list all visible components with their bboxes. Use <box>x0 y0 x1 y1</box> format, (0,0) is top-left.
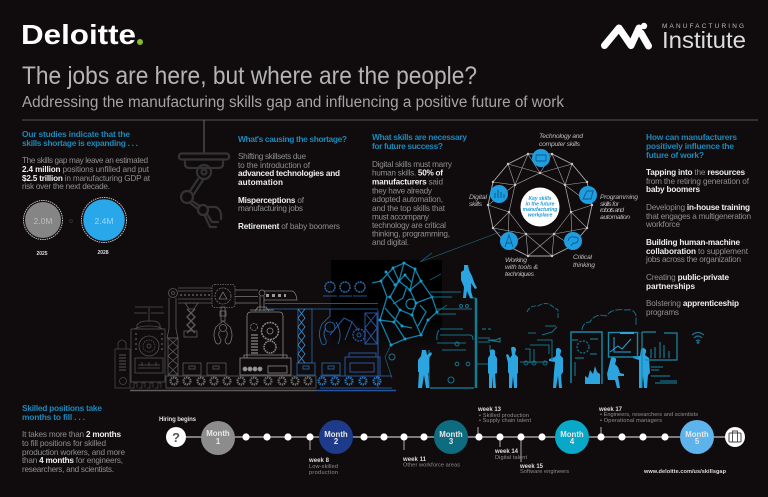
icon: critical thinking <box>564 232 582 250</box>
machine: left cabinet <box>115 340 161 388</box>
heading: influence <box>646 132 737 160</box>
text: human-machine: jobs across the organization <box>645 255 741 264</box>
text: human-machine: collaboration to supplement <box>646 247 749 256</box>
hub: key skills <box>520 188 560 226</box>
text: misperceptions: Misperceptions of <box>238 196 305 205</box>
text: partnerships: partnerships <box>646 282 695 291</box>
text: in-house: that engages a multigeneration <box>646 212 751 221</box>
text: skilled positions paragraph: researchers, and scientists. <box>22 465 114 474</box>
text: apprenticeship: programs <box>646 308 679 317</box>
icon: briefcase <box>725 427 745 447</box>
machine: control cabinet <box>240 307 291 375</box>
icon: question mark <box>166 427 186 447</box>
label: week 11 <box>402 457 460 468</box>
text: skills gap line 4: risk over the next decade. <box>22 182 110 191</box>
heading: skills: What skills are necessary <box>372 132 467 142</box>
person: sitting <box>607 357 624 388</box>
label: week 17: • Operational managers <box>600 418 662 424</box>
node: month 3: Month <box>439 430 463 439</box>
text: tapping: baby boomers <box>646 185 700 194</box>
hub: key skills: Key skills <box>528 196 552 202</box>
heading: influence: future of work? <box>646 150 704 160</box>
label: hiring begins: Hiring begins <box>159 417 197 423</box>
label: programming: Programming <box>600 194 638 201</box>
chart: 2025 circle <box>24 200 62 257</box>
text: in-house <box>645 203 751 229</box>
text: skills paragraph: Digital skills must marry <box>372 160 453 169</box>
text: in-house: Developing in-house training <box>646 203 750 212</box>
screen: gear dashboard <box>571 332 602 384</box>
label: tools: techniques <box>505 271 535 278</box>
heading: studies: Our studies indicate that the <box>22 129 130 139</box>
person: looking up <box>418 350 432 388</box>
label: programming <box>600 194 638 221</box>
text: skills paragraph: manufacturers said <box>372 178 443 186</box>
conveyor belt gray <box>130 376 316 390</box>
node: month 2: Month <box>324 430 348 439</box>
node: month 1: Month <box>206 429 230 438</box>
label: critical thinking: Critical <box>573 254 592 261</box>
cloud: right <box>582 310 636 330</box>
label: week 11: Other workforce areas <box>403 462 460 468</box>
black backdrop behind network burst <box>331 260 442 350</box>
hub: key skills: manufacturing <box>523 207 557 213</box>
panel: skills necessary <box>372 132 467 247</box>
text: skills paragraph: adopted automation, <box>372 195 443 204</box>
machine: gear and claw <box>212 284 235 344</box>
text: partnerships <box>646 273 729 291</box>
label: week 13 <box>477 407 531 424</box>
text: skills paragraph: technology are critical <box>372 221 446 230</box>
text: skilled positions paragraph <box>22 430 125 474</box>
text: tapping: from the retiring generation of <box>646 177 750 186</box>
text: apprenticeship <box>646 299 739 317</box>
text: skills paragraph: and the top skills that <box>372 204 446 213</box>
node: month 3: 3 <box>449 437 454 446</box>
person: standing <box>488 349 497 388</box>
label: tools: Working <box>505 257 527 264</box>
label: critical thinking: thinking <box>573 262 595 269</box>
heading: skills line 2: for future success? <box>372 141 443 151</box>
text: skills gap line 3: $2.5 trillion in manufacturing GDP at <box>22 174 151 183</box>
robot heads row <box>323 282 367 296</box>
icon: digital <box>490 185 508 203</box>
label: week 15 <box>519 464 569 475</box>
heading: skilled positions: Skilled positions take <box>22 403 102 413</box>
title: The jobs are here, but where are the people? <box>22 62 477 90</box>
node: month 5 <box>680 420 714 454</box>
text: skills paragraph: thinking, programming, <box>372 230 450 238</box>
chart: 2028 circle: 2.4M <box>95 216 113 226</box>
icon: question mark: ? <box>172 430 180 445</box>
heading: influence: positively influence the <box>646 141 734 151</box>
icon: wifi <box>692 332 704 343</box>
heading: skilled positions: months to fill . . . <box>22 412 85 422</box>
label: week 8: Low-skilled <box>309 464 338 470</box>
text: automation: automation <box>238 178 283 187</box>
label: week 14 <box>494 449 527 461</box>
machine: blue rail and lattice <box>265 304 378 375</box>
node: month 2 <box>319 420 353 454</box>
text: skilled positions paragraph: than 4 months for engineers, <box>22 456 123 465</box>
text: skills paragraph: they have already <box>372 186 433 196</box>
person: with chart <box>549 348 563 388</box>
label: digital <box>469 194 487 208</box>
chart: 2025 circle: 2.0M <box>34 216 52 226</box>
label: programming: skills for <box>600 201 620 208</box>
text: advanced technologies: advanced technologies and <box>238 169 340 178</box>
text: retirement: Retirement of baby boomers <box>238 222 340 231</box>
text: partnerships: Creating public-private <box>646 273 729 282</box>
machine: rail <box>235 290 297 311</box>
label: week 13: week 13 <box>477 407 502 413</box>
text: tapping <box>646 168 750 194</box>
text: introduction: to the introduction of <box>238 161 311 170</box>
text: shifting skillsets: Shifting skillsets due <box>238 152 306 161</box>
node: month 3 <box>434 420 468 454</box>
ticks <box>310 427 601 462</box>
machine: pillar with arm <box>167 288 212 375</box>
heading: skilled positions <box>22 403 102 422</box>
illustration: people <box>418 265 650 388</box>
label: digital: skills <box>469 201 483 208</box>
icon: robot arm <box>179 154 229 227</box>
label: week 17 <box>598 407 698 424</box>
text: skills gap line 1: The skills gap may leave an estimated <box>22 156 148 165</box>
screen: line chart <box>608 332 638 357</box>
label: week 8: production <box>309 470 338 476</box>
heading: causing: What's causing the shortage? <box>238 134 347 144</box>
heading: influence: How can manufacturers <box>646 132 737 142</box>
person: on tower <box>461 265 477 298</box>
illustration: factory production line <box>115 282 396 390</box>
illustration: dashboards and clouds <box>482 304 677 388</box>
logo: Deloitte: Deloitte <box>21 19 136 50</box>
node: month 4 <box>555 420 589 454</box>
panel: skilled positions text <box>22 403 125 474</box>
text: human-machine: Building human-machine <box>646 238 740 247</box>
text: in-house: workforce <box>645 220 680 229</box>
label: week 15: Software engineers <box>520 469 569 475</box>
subtitle: Addressing the manufacturing skills gap and influencing a positive future of work <box>22 94 564 111</box>
screen: bar chart <box>642 332 677 388</box>
illustration: digital network burst <box>372 232 500 378</box>
label: tools <box>505 257 538 278</box>
text: skilled positions paragraph: It takes more than 2 months <box>22 430 121 439</box>
text: skills paragraph: human skills. 50% of <box>372 168 443 178</box>
person: holding tablet <box>506 347 518 388</box>
label: programming: robots and <box>600 207 624 214</box>
boxes on belt <box>183 363 226 375</box>
text: human-machine <box>645 238 749 264</box>
text: apprenticeship: Bolstering apprenticeship <box>646 299 739 308</box>
label: week 14: week 14 <box>494 449 519 455</box>
node: month 1 <box>201 421 235 455</box>
label: week 15: week 15 <box>519 464 544 470</box>
text: skills paragraph: must accompany <box>372 212 430 222</box>
text: tapping: Tapping into the resources <box>646 168 745 177</box>
icon: flow elements <box>520 326 557 365</box>
icon: programming <box>579 186 597 204</box>
logo: Manufacturing Institute: MANUFACTURING <box>662 23 744 30</box>
label: week 13: • Supply chain talent <box>479 418 531 424</box>
chart: 2028 circle <box>82 198 126 256</box>
logo: Manufacturing Institute: Institute <box>662 27 746 53</box>
label: week 17: week 17 <box>598 407 623 413</box>
label: week 11: week 11 <box>402 457 427 463</box>
panel: how can manufacturers influence <box>645 132 751 317</box>
person: presenting <box>633 348 650 388</box>
label: critical thinking <box>573 254 595 269</box>
chart: 2028 circle: 2028 <box>97 250 109 256</box>
icon: technology <box>532 149 550 167</box>
node: month 4: 4 <box>570 437 575 446</box>
url: www.deloitte.com/us/skillsgap <box>643 469 727 475</box>
panel: skills shortage expanding <box>22 129 151 257</box>
label: technology: Technology and <box>539 133 583 140</box>
node: month 5: Month <box>685 430 709 439</box>
node: month 4: Month <box>560 430 584 439</box>
label: week 17: • Engineers, researchers and scientists <box>600 412 698 418</box>
panel: what's causing the shortage <box>238 134 347 231</box>
illustration: tower <box>429 292 490 388</box>
node: month 2: 2 <box>334 437 339 446</box>
timeline dots <box>242 433 669 441</box>
text: skilled positions paragraph: production workers, and more <box>22 448 125 457</box>
text: skilled positions paragraph: to fill positions for skilled <box>22 439 106 448</box>
text: skills gap line 2: 2.4 million positions unfilled and put <box>22 165 150 174</box>
label: week 14: Digital talent <box>495 455 527 461</box>
robot arm and gear blue <box>316 310 396 390</box>
text: skills paragraph: and digital. <box>372 238 409 247</box>
hub: key skills: workplace <box>528 212 552 218</box>
chart: 2025 circle: 2025 <box>36 251 48 257</box>
chart: hiring timeline <box>159 407 745 476</box>
chart: key skills network <box>469 133 638 278</box>
text: skills paragraph <box>372 160 453 247</box>
icon: tools <box>500 232 518 250</box>
node: month 5: 5 <box>695 437 700 446</box>
cloud: left <box>527 304 558 319</box>
node: month 1: 1 <box>216 437 221 446</box>
logo: Manufacturing Institute <box>604 23 746 53</box>
label: week 8 <box>308 458 338 476</box>
label: technology: computer skills <box>539 141 581 148</box>
label: tools: with tools & <box>505 264 538 271</box>
hub: key skills: in the future <box>526 202 555 208</box>
machine: press <box>131 307 165 382</box>
label: digital: Digital <box>469 194 487 201</box>
label: programming: automation <box>600 214 630 221</box>
heading: studies second line: skills shortage is expanding . . . <box>22 138 138 148</box>
label: technology <box>539 133 583 148</box>
text: manufacturing jobs: manufacturing jobs <box>238 204 303 213</box>
label: week 13: • Skilled production <box>479 413 529 419</box>
label: week 8: week 8 <box>308 458 330 464</box>
